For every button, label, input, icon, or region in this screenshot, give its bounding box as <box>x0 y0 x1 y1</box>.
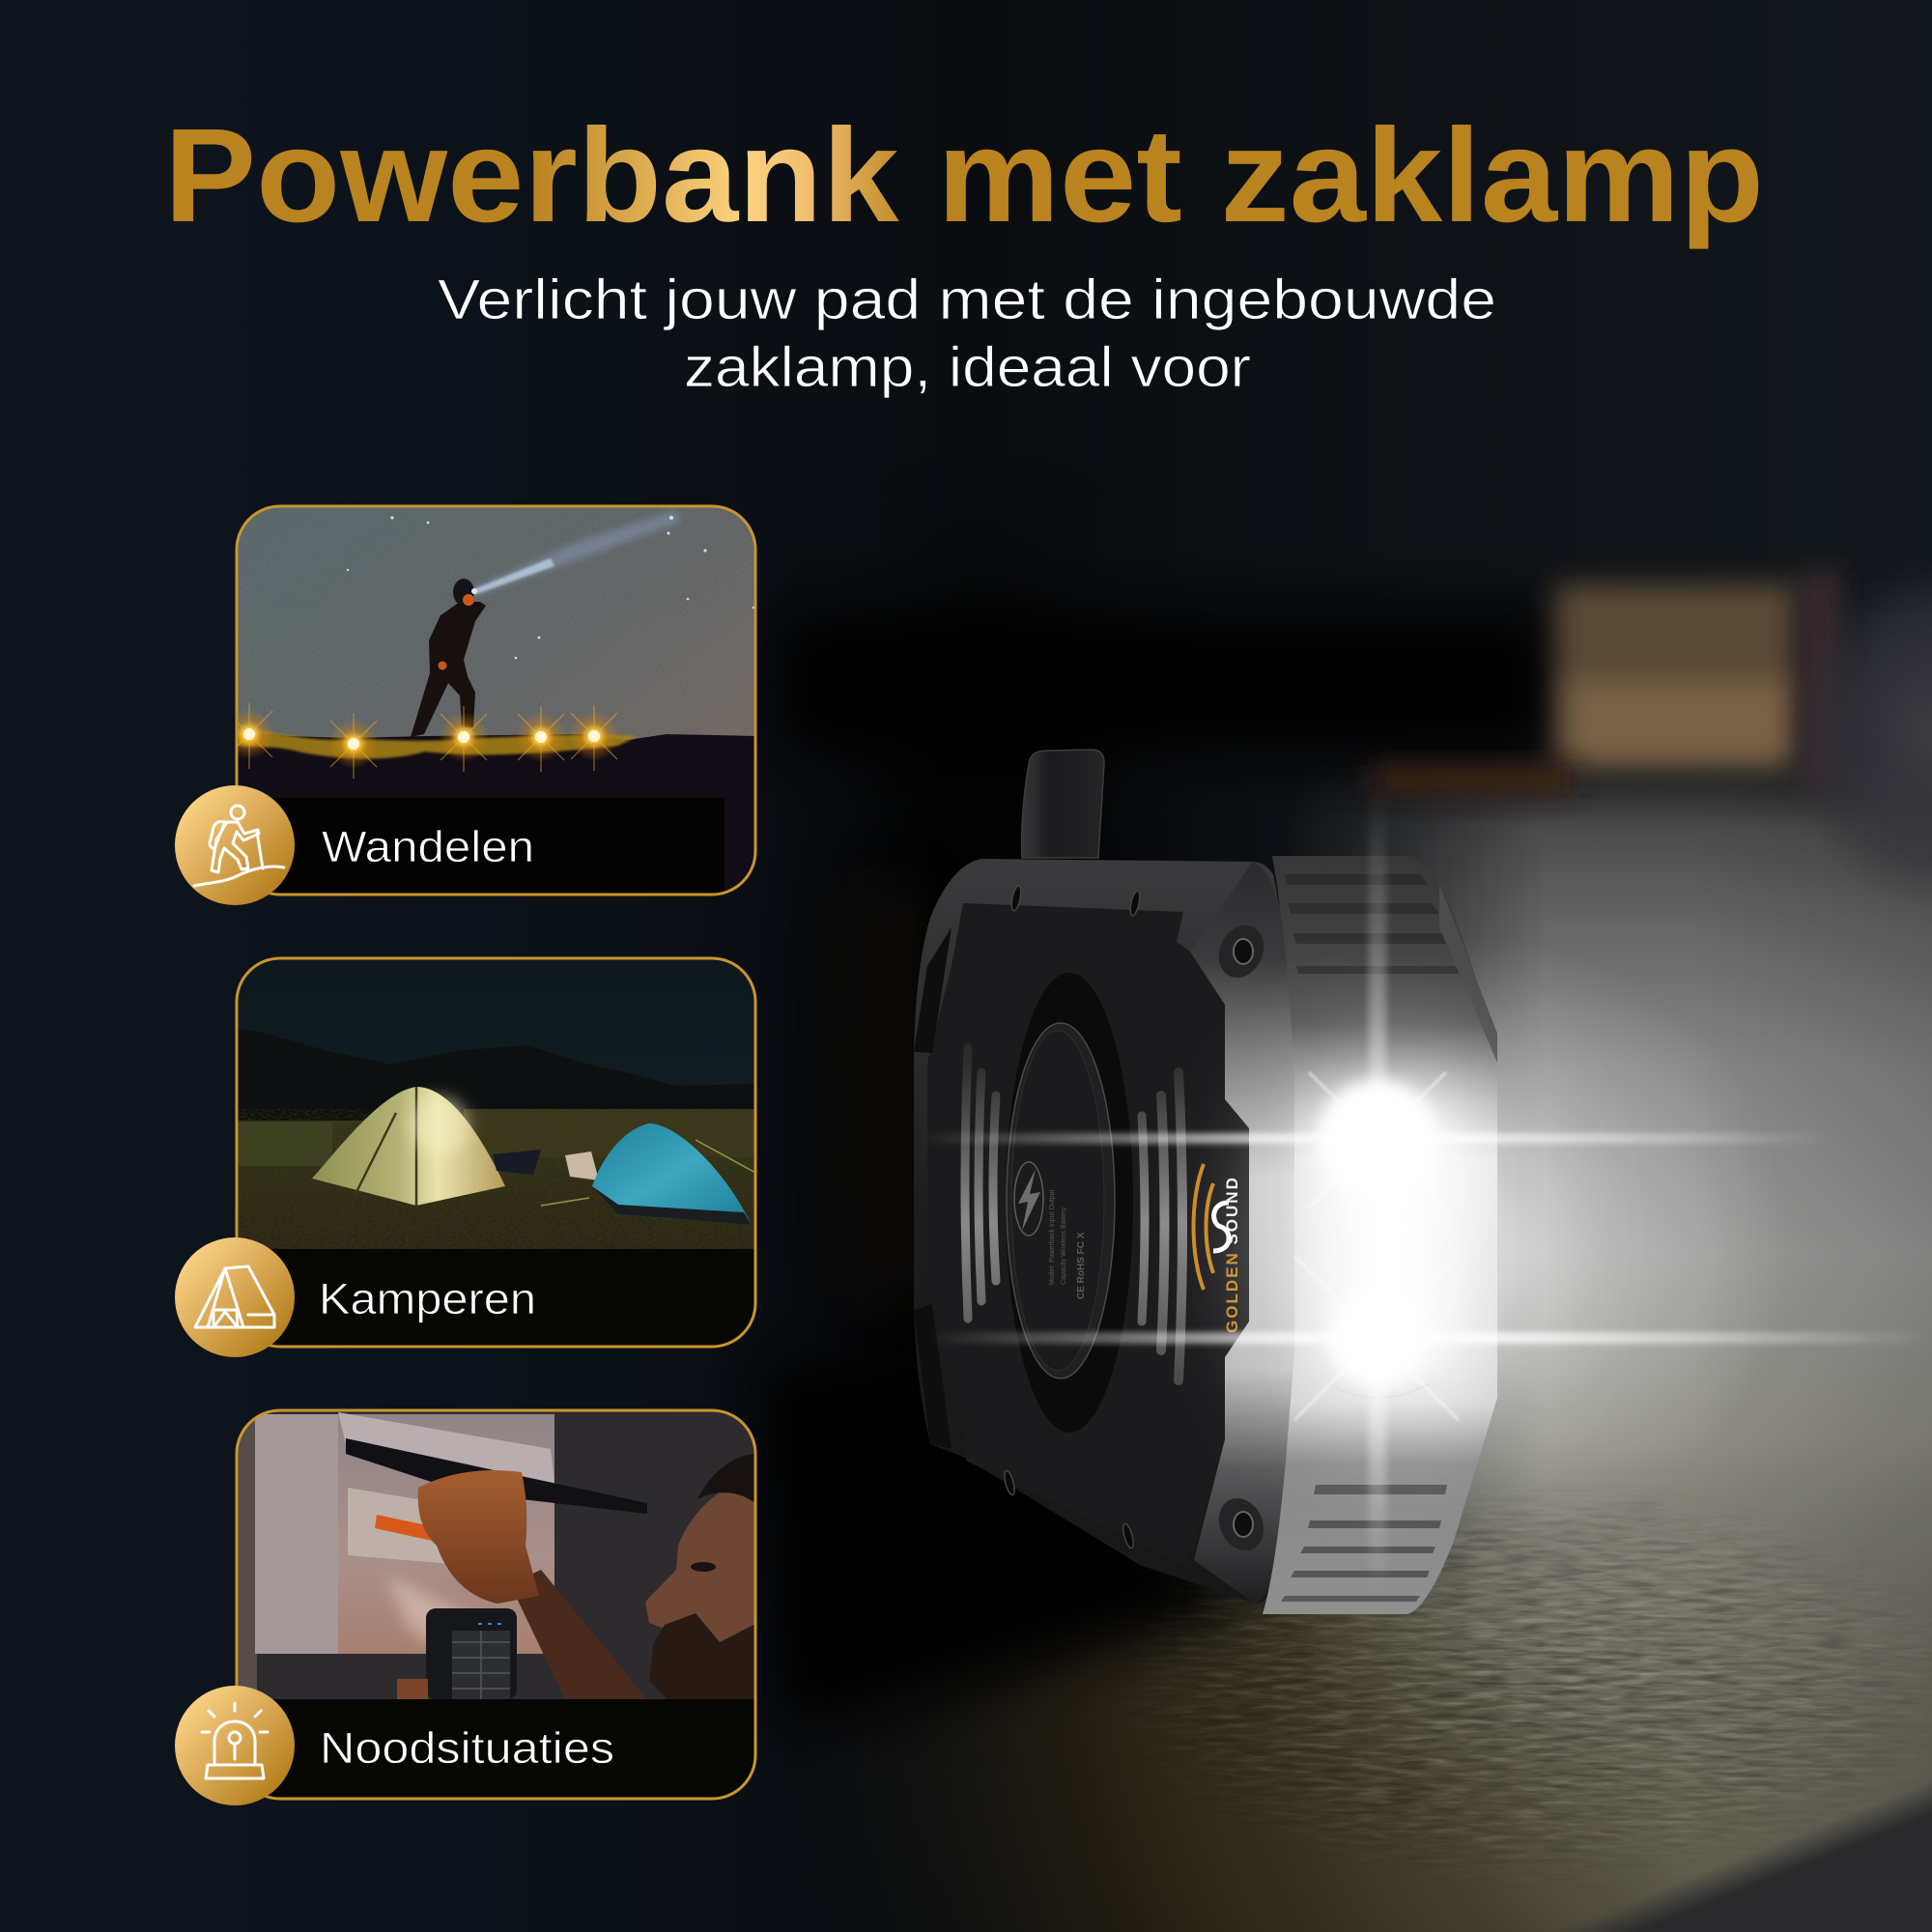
spec text: Model: Powerbank Input Output <box>1049 1189 1056 1285</box>
mounting slots <box>1003 885 1142 1549</box>
label: Noodsituaties: Noodsituaties <box>320 1723 614 1773</box>
photo: night camping tents <box>236 957 757 1348</box>
card border <box>237 1410 755 1799</box>
photo: hiker with headlamp <box>224 505 757 895</box>
label: Kamperen: Kamperen <box>319 1274 536 1323</box>
spec text: CE RoHS FC X <box>1076 1232 1087 1299</box>
belt clip <box>1022 750 1104 858</box>
card border <box>237 958 755 1347</box>
brand logo: GOLDEN SOUND <box>1223 1176 1241 1333</box>
side notches <box>914 927 952 1449</box>
icon: emergency siren <box>175 1686 295 1805</box>
product: powerbank with flashlight <box>914 750 1932 1614</box>
subtitle <box>438 269 1496 399</box>
title: Powerbank met zaklamp <box>164 101 1764 250</box>
label: Wandelen: Wandelen <box>322 822 534 871</box>
panel: Wandelen <box>175 505 757 905</box>
back panel <box>927 903 1249 1565</box>
panel: Kamperen <box>175 957 757 1357</box>
rubber bumper <box>1263 856 1497 1614</box>
brand logo <box>1194 1164 1241 1333</box>
grip ribs <box>965 1048 1182 1380</box>
device body <box>914 859 1299 1603</box>
spec text: Capacity Wireless Battery <box>1061 1207 1067 1285</box>
subtitle: zaklamp, ideaal voor <box>684 336 1251 399</box>
background scene <box>717 0 1932 1932</box>
subtitle: Verlicht jouw pad met de ingebouwde <box>438 269 1496 331</box>
corner screws <box>1210 918 1272 1558</box>
photo: man checking fuse box with flashlight <box>236 1409 757 1800</box>
flashlight glow <box>918 787 1932 1589</box>
wireless charging pad <box>1006 973 1133 1433</box>
icon: tent <box>175 1237 295 1357</box>
spec text <box>1049 1189 1087 1299</box>
card border <box>237 506 755 895</box>
silver front frame <box>1190 862 1294 1603</box>
icon: hiker <box>175 785 295 905</box>
lightning mark <box>1014 1162 1043 1236</box>
panel: Noodsituaties <box>175 1409 757 1805</box>
